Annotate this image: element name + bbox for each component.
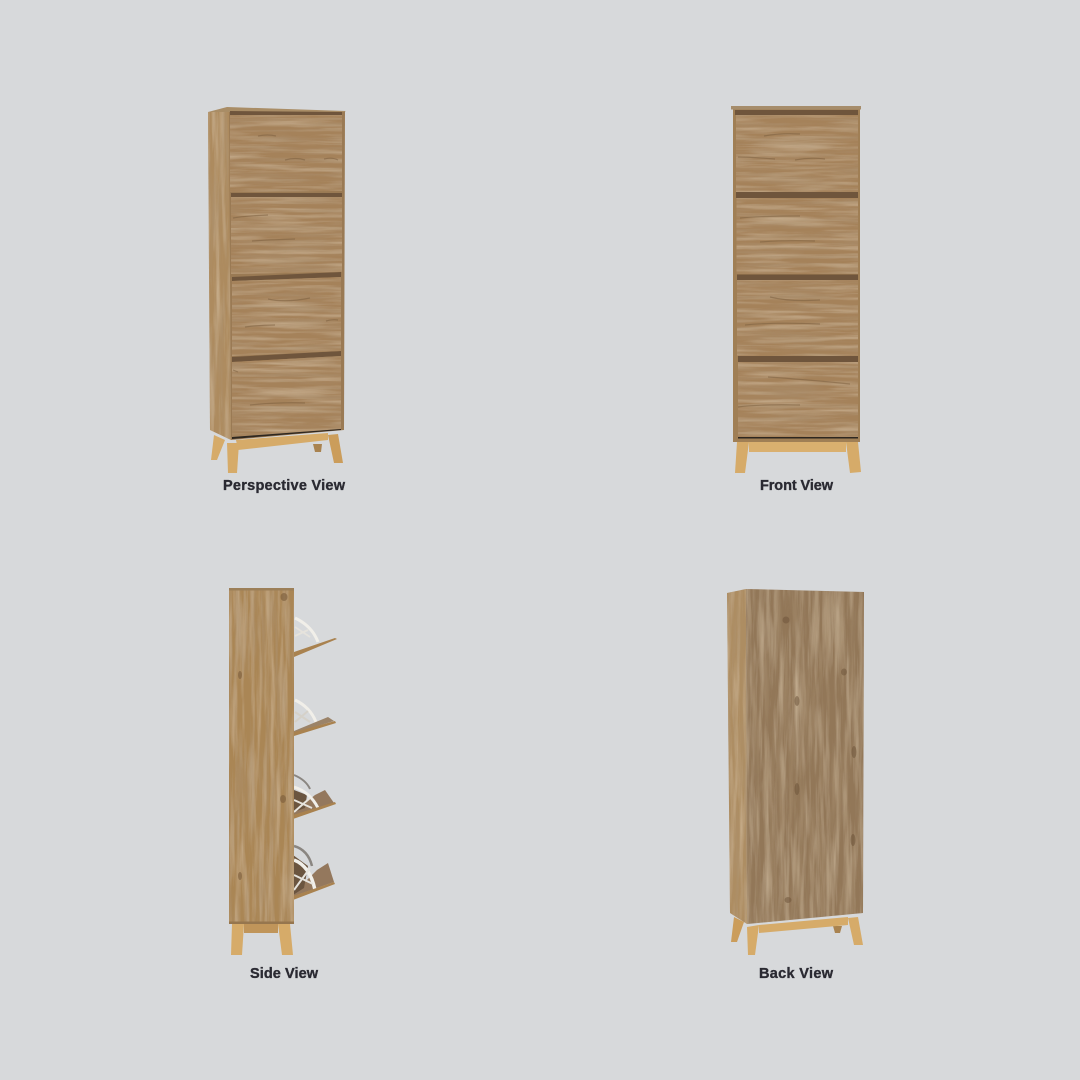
label: back view: Back View — [759, 966, 834, 982]
flap 1 with rack — [294, 618, 337, 657]
gaps — [735, 110, 858, 438]
body — [733, 108, 860, 442]
wood knots — [238, 593, 288, 880]
doors — [736, 115, 858, 437]
cabinet: perspective view — [208, 107, 346, 473]
doors — [230, 115, 342, 437]
back panel — [746, 589, 864, 924]
side panel — [727, 589, 747, 924]
flap 2 with rack — [294, 700, 336, 736]
legs and rail — [731, 917, 863, 955]
front frame — [229, 111, 345, 440]
gaps — [230, 111, 342, 362]
side panel — [208, 112, 231, 440]
top and bottom edges — [229, 588, 294, 590]
legs and rail — [231, 924, 293, 955]
label: front view: Front View — [760, 478, 834, 494]
label: perspective view: Perspective View — [223, 478, 346, 494]
flap 4 with rack — [293, 846, 335, 900]
wood knots — [782, 616, 856, 903]
legs and rail — [211, 433, 343, 473]
cabinet: side view with open flaps — [229, 588, 337, 955]
label: side view: Side View — [250, 966, 319, 982]
top cap — [208, 107, 346, 112]
legs and rail — [735, 442, 861, 473]
flap 3 with rack — [293, 775, 336, 819]
top cap — [731, 106, 861, 110]
wood knots — [738, 134, 850, 407]
cabinet: back view — [727, 589, 864, 955]
bottom shadow line — [232, 429, 341, 439]
side panel — [229, 588, 294, 924]
wood knots — [233, 135, 338, 405]
cabinet: front view — [731, 106, 861, 473]
